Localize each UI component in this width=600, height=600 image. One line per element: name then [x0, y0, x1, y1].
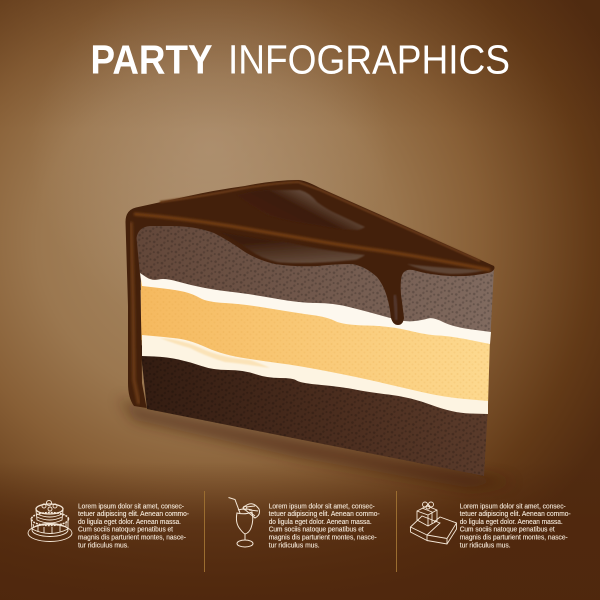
text block: gifts: tur ridiculus mus. — [460, 542, 511, 549]
background glow — [0, 0, 600, 400]
text block: gifts: do ligula eget dolor. Aenean massa. — [460, 519, 563, 526]
text block: cocktail: tetuer adipiscing elit. Aenean commo- — [269, 511, 380, 518]
title — [90, 36, 510, 82]
text block: cocktail: tur ridiculus mus. — [269, 542, 320, 549]
text block: gifts — [460, 503, 571, 549]
illustration: chocolate cake slice — [118, 180, 515, 488]
text block: gifts: tetuer adipiscing elit. Aenean commo- — [460, 511, 571, 518]
top shading — [0, 0, 600, 130]
text block: cake: magnis dis parturient montes, nasce- — [78, 534, 187, 542]
upper cream layer — [140, 273, 491, 344]
text block: cocktail: magnis dis parturient montes, nasce- — [269, 534, 377, 542]
text block: cake: tetuer adipiscing elit. Aenean commo- — [78, 511, 190, 518]
text block: gifts: magnis dis parturient montes, nasce- — [460, 534, 568, 542]
chocolate top rim — [160, 182, 480, 261]
chocolate drip highlight — [394, 295, 397, 320]
divider 1 — [204, 491, 205, 572]
text block: cocktail: do ligula eget dolor. Aenean massa. — [269, 519, 372, 526]
text block: cocktail: Lorem ipsum dolor sit amet, consec- — [269, 503, 375, 510]
panel: gifts note — [410, 502, 571, 549]
text block: gifts: Lorem ipsum dolor sit amet, consec- — [460, 503, 566, 510]
text block: cake: Cum sociis natoque penatibus et — [78, 527, 173, 534]
bottom sponge layer — [140, 345, 488, 476]
lower cream layer — [142, 335, 488, 414]
top sponge layer — [130, 220, 494, 345]
text block: cake — [78, 503, 190, 549]
text block: gifts: Cum sociis natoque penatibus et — [460, 527, 555, 534]
icon: gift boxes — [410, 502, 456, 544]
yellow sponge layer — [141, 280, 490, 405]
icon: tiered cake — [28, 500, 72, 542]
divider 2 — [396, 491, 397, 572]
panel: cocktail note — [228, 498, 380, 549]
text block: cake: do ligula eget dolor. Aenean massa. — [78, 519, 181, 526]
panel: cake note — [28, 500, 190, 549]
chocolate topping — [126, 180, 494, 408]
text block: cake: tur ridiculus mus. — [78, 542, 129, 549]
text block: cake: Lorem ipsum dolor sit amet, consec- — [78, 503, 185, 510]
text block: cocktail — [269, 503, 380, 549]
title: PARTY — [90, 36, 212, 82]
chocolate shine stroke — [134, 214, 490, 270]
lower gloss on chocolate — [220, 232, 365, 263]
text block: cocktail: Cum sociis natoque penatibus et — [269, 527, 364, 534]
upper gloss on chocolate — [237, 190, 365, 230]
title: INFOGRAPHICS — [228, 36, 510, 82]
icon: cocktail glass — [228, 498, 260, 547]
bottom shading — [0, 462, 600, 600]
right gloss on chocolate — [407, 264, 486, 274]
left side highlight — [131, 222, 139, 404]
cake shadow — [118, 398, 515, 488]
